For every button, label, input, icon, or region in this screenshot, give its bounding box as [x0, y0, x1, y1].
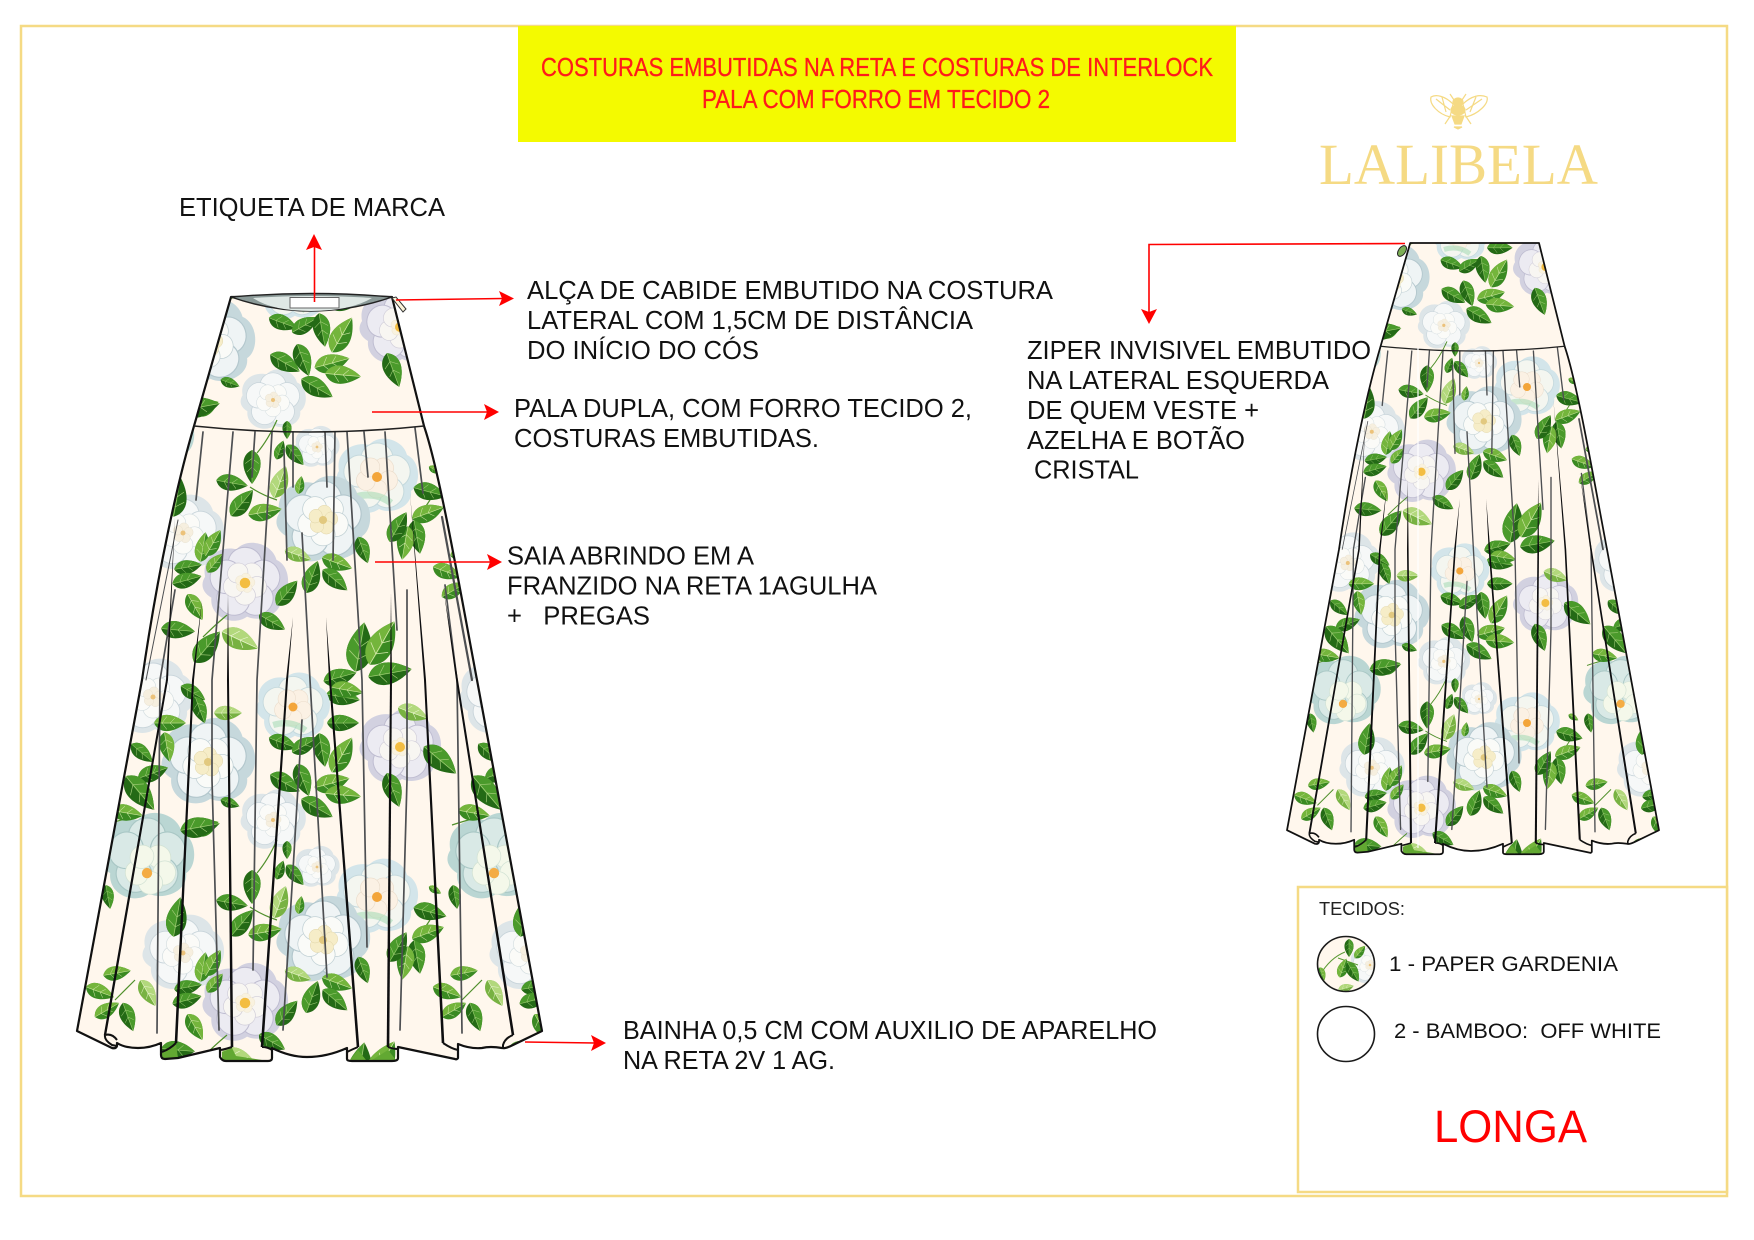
text block: hanger loop: ALÇA DE CABIDE EMBUTIDO NA COSTURA — [527, 277, 1053, 305]
text block: yoke: COSTURAS EMBUTIDAS. — [514, 425, 819, 453]
header banner: PALA COM FORRO EM TECIDO 2 — [702, 84, 1050, 114]
text block: hanger loop: DO INÍCIO DO CÓS — [527, 336, 759, 365]
text block: zipper — [1027, 337, 1371, 484]
icon: bee — [1431, 94, 1487, 129]
swatch: fabric 2 — [1318, 1006, 1374, 1062]
text block: hem: BAINHA 0,5 CM COM AUXILIO DE APARELHO — [623, 1017, 1157, 1045]
text block: zipper: ZIPER INVISIVEL EMBUTIDO — [1027, 337, 1371, 365]
text block: zipper: CRISTAL — [1034, 456, 1139, 484]
text block: skirt body: SAIA ABRINDO EM A — [507, 542, 754, 570]
waistband interior with brand label — [231, 294, 406, 312]
pleat lines — [146, 428, 472, 1033]
label: brand tag: ETIQUETA DE MARCA — [179, 194, 445, 222]
skirt: side view — [1014, 196, 1754, 908]
logo: Lalibela: LALIBELA — [1319, 132, 1598, 197]
header banner: COSTURAS EMBUTIDAS NA RETA E COSTURAS DE INTERLOCK — [541, 52, 1214, 82]
text block: yoke: PALA DUPLA, COM FORRO TECIDO 2, — [514, 395, 972, 423]
fabric print — [0, 239, 810, 1128]
text block: hem: NA RETA 2V 1 AG. — [623, 1047, 835, 1075]
arrow: zipper — [1141, 244, 1405, 324]
panel: fabrics legend — [1298, 887, 1727, 1192]
pleat folds — [104, 493, 514, 1047]
logo: Lalibela — [1319, 94, 1598, 197]
legend heading: TECIDOS: — [1319, 899, 1405, 919]
text block: hem — [623, 1017, 1157, 1075]
text block: hanger loop — [527, 277, 1053, 365]
header banner — [518, 26, 1236, 142]
text block: zipper: DE QUEM VESTE + — [1027, 397, 1259, 425]
text block: zipper: NA LATERAL ESQUERDA — [1027, 367, 1329, 395]
text block: skirt body — [507, 542, 877, 630]
text block: hanger loop: LATERAL COM 1,5CM DE DISTÂNCIA — [527, 306, 973, 335]
text block: yoke — [514, 395, 972, 453]
side-view centre seam highlight — [1417, 348, 1419, 848]
arrow: hanger loop — [396, 291, 514, 306]
yoke seam — [194, 426, 424, 432]
arrow: skirt body — [375, 554, 502, 570]
outline — [77, 297, 542, 1061]
arrow: brand label — [306, 234, 322, 302]
hem fold details — [105, 1035, 513, 1052]
skirt: front view — [0, 239, 810, 1128]
text block: zipper: AZELHA E BOTÃO — [1027, 426, 1245, 455]
text block: skirt body: + PREGAS — [507, 602, 650, 630]
swatch: fabric 1 — [1316, 936, 1376, 992]
text block: skirt body: FRANZIDO NA RETA 1AGULHA — [507, 572, 877, 600]
arrow: hem — [525, 1035, 606, 1051]
legend item 2: 2 - BAMBOO: OFF WHITE — [1394, 1019, 1661, 1043]
legend item 1: 1 - PAPER GARDENIA — [1389, 952, 1619, 976]
icon: zipper button — [1396, 244, 1408, 258]
arrow: yoke — [372, 404, 499, 420]
length label: LONGA — [1434, 1101, 1587, 1152]
hanger loop — [392, 297, 406, 312]
